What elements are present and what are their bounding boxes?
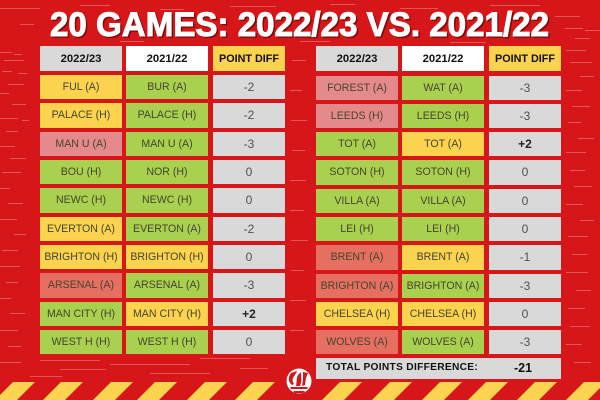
panel: right table: LEI (H)	[426, 223, 460, 235]
panel: right table: -3	[520, 109, 530, 123]
panel: left table: +2	[242, 307, 256, 321]
panel: right table: 0	[522, 194, 528, 208]
panel: right table: 2022/23	[337, 52, 377, 64]
panel: right table: TOT (A)	[424, 138, 462, 150]
panel: left table: 0	[246, 335, 252, 349]
panel: left table: PALACE (H)	[52, 109, 110, 121]
panel: left table: ARSENAL (A)	[134, 279, 200, 291]
panel: left table: MAN U (A)	[141, 138, 193, 150]
panel: left table: 0	[246, 165, 252, 179]
panel: right table: BRENT (A)	[331, 251, 383, 263]
panel: right table: VILLA (A)	[420, 195, 466, 207]
panel: right table: WOLVES (A)	[412, 336, 474, 348]
panel: left table: 0	[246, 250, 252, 264]
panel: left table: EVERTON (A)	[47, 223, 115, 235]
panel: left table: -3	[244, 278, 254, 292]
panel: right table: SOTON (H)	[329, 166, 385, 178]
panel: left table: POINT DIFF	[219, 52, 279, 64]
panel: left table: -3	[244, 137, 254, 151]
panel: right table: +2	[518, 137, 532, 151]
panel: left table: BRIGHTON (H)	[130, 251, 204, 263]
panel: left table: WEST H (H)	[138, 336, 196, 348]
panel: right table: 0	[522, 222, 528, 236]
panel: right table: BRENT (A)	[417, 251, 469, 263]
panel: left table: -2	[244, 222, 254, 236]
panel: right table: -3	[520, 81, 530, 95]
panel: left table: MAN CITY (H)	[133, 308, 201, 320]
panel: right table: SOTON (H)	[415, 166, 471, 178]
panel: right table: CHELSEA (H)	[324, 308, 390, 320]
panel: right table: -3	[520, 335, 530, 349]
panel: left table: NEWC (H)	[142, 194, 192, 206]
panel: right table: LEEDS (H)	[417, 110, 469, 122]
total points difference row: TOTAL POINTS DIFFERENCE:	[326, 362, 478, 373]
panel: right table: WOLVES (A)	[326, 336, 388, 348]
panel: left table: PALACE (H)	[138, 109, 196, 121]
panel: left table: ARSENAL (A)	[48, 279, 114, 291]
panel: right table: 2021/22	[423, 52, 463, 64]
panel: left table: NOR (H)	[146, 166, 188, 178]
panel: right table: BRIGHTON (A)	[407, 280, 479, 292]
panel: left table: -2	[244, 108, 254, 122]
panel: right table: CHELSEA (H)	[410, 308, 476, 320]
panel: left table: MAN CITY (H)	[47, 308, 115, 320]
panel: left table: FUL (A)	[63, 81, 99, 93]
panel: left table: 2021/22	[147, 52, 187, 64]
panel: right table: -1	[520, 250, 530, 264]
panel: right table: VILLA (A)	[334, 195, 380, 207]
panel: right table: POINT DIFF	[495, 52, 555, 64]
panel: right table: WAT (A)	[423, 82, 463, 94]
panel: right table	[316, 46, 561, 379]
panel: right table: LEEDS (H)	[331, 110, 383, 122]
panel: right table: TOT (A)	[338, 138, 376, 150]
panel: left table: EVERTON (A)	[133, 223, 201, 235]
panel: left table: BOU (H)	[61, 166, 101, 178]
panel: left table: WEST H (H)	[52, 336, 110, 348]
panel: right table: BRIGHTON (A)	[321, 280, 393, 292]
panel: left table: NEWC (H)	[56, 194, 106, 206]
panel: right table: 0	[522, 307, 528, 321]
total points difference row	[316, 358, 561, 378]
panel: right table: LEI (H)	[340, 223, 374, 235]
panel: left table: BRIGHTON (H)	[44, 251, 118, 263]
panel: left table: MAN U (A)	[55, 138, 107, 150]
panel: left table: 0	[246, 193, 252, 207]
panel: right table: -3	[520, 279, 530, 293]
panel: left table: BUR (A)	[147, 81, 187, 93]
panel: right table: FOREST (A)	[327, 82, 387, 94]
panel: left table	[40, 46, 285, 354]
panel: right table: 0	[522, 165, 528, 179]
panel: left table: -2	[244, 80, 254, 94]
panel: left table: 2022/23	[61, 52, 101, 64]
total points difference row: -21	[514, 360, 532, 374]
